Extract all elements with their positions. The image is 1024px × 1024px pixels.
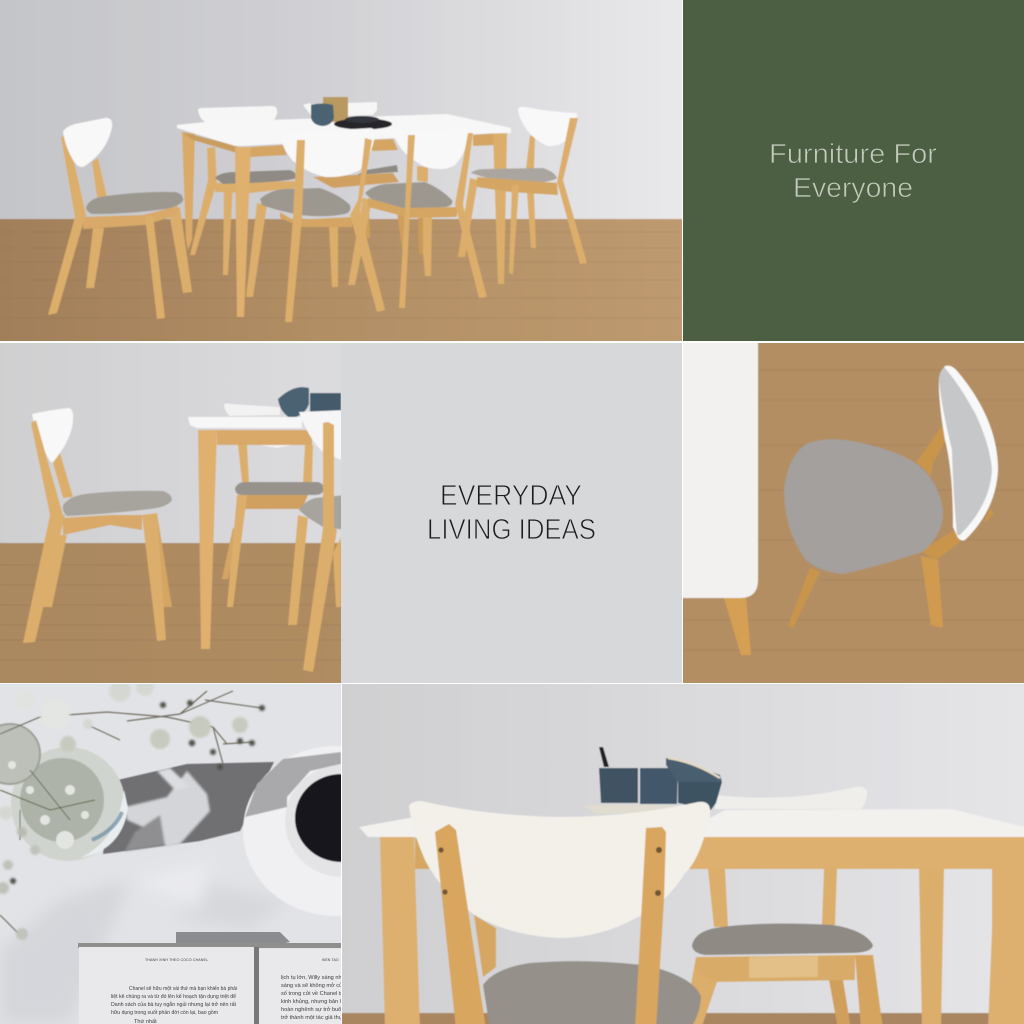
light caustic through vase xyxy=(125,768,210,851)
panel: dining set photo xyxy=(0,0,687,346)
rear chair back rest xyxy=(715,787,867,809)
book text: THANH XINH THEO COCO CHANEL xyxy=(145,958,208,962)
chair: front centre xyxy=(246,128,385,322)
chair back xyxy=(939,366,998,540)
chair: main side view xyxy=(23,408,172,643)
tableware xyxy=(311,97,392,130)
chair: front partly cropped xyxy=(288,410,346,672)
book text: Chanel sẽ hữu một vài thứ mà bạn khiến bà phải xyxy=(129,986,237,992)
table corner and leg xyxy=(678,338,758,655)
rear chair frame xyxy=(683,869,883,1024)
open book xyxy=(78,932,357,1024)
book text: Danh sách của bà tuy ngắn ngủi nhưng lại trở nên rất xyxy=(111,1001,236,1008)
baby's breath branches xyxy=(0,691,262,935)
book text: lịch tụ lớn, Willy sáng nhất xyxy=(281,975,347,981)
panel: side view chair and table photo xyxy=(0,338,346,688)
dining table xyxy=(177,114,511,317)
shadow on cloth xyxy=(103,762,274,854)
coffee cup xyxy=(286,766,341,876)
heading: furniture for everyone: Everyone xyxy=(793,172,913,203)
heading: furniture for everyone: Furniture For xyxy=(769,138,937,169)
chair: left xyxy=(48,118,192,319)
chair seat xyxy=(784,439,943,574)
heading: furniture for everyone xyxy=(769,138,937,203)
baby's breath flowers xyxy=(0,678,265,940)
book text: trở thành một tác giả thực xyxy=(281,1014,346,1021)
chair: back behind table xyxy=(222,403,324,607)
panel: table close-up photo xyxy=(337,679,1024,1024)
book text: liệt kê chúng ra và từ đó lên kế hoạch tận dụng triệt để xyxy=(111,993,236,1000)
book text: hoàn nghênh sự trở buổi đó xyxy=(281,1006,350,1013)
heading: everyday living ideas: EVERYDAY xyxy=(440,480,582,512)
saucer xyxy=(242,746,341,916)
tableware xyxy=(582,747,722,814)
dining table xyxy=(359,809,1024,1024)
panel: grey text block xyxy=(341,343,682,683)
book text: kinh khủng, nhưng bản lột xyxy=(281,998,346,1005)
chair: right xyxy=(458,107,587,274)
chair: front xyxy=(409,801,710,1024)
chair: back left xyxy=(190,106,297,275)
book text: hữu dụng trong suốt phần đời còn lại, bao gồm xyxy=(111,1010,218,1016)
book text: số trong cửi về Chanel trong xyxy=(281,990,352,997)
book text xyxy=(111,957,357,1024)
table with tableware xyxy=(188,387,341,649)
glass vase xyxy=(0,724,128,861)
chair legs xyxy=(788,426,994,628)
panel: still life photo xyxy=(0,684,341,1024)
still life scene xyxy=(0,684,341,1022)
chair: back centre xyxy=(303,102,432,287)
book text: sáng và sẽ không mở cửa cho xyxy=(281,982,357,989)
book text: KIỂN TẠO xyxy=(322,957,339,962)
heading: everyday living ideas xyxy=(427,480,596,546)
heading: everyday living ideas: LIVING IDEAS xyxy=(427,514,596,546)
chair: front right xyxy=(348,128,487,308)
panel: chair from above photo xyxy=(678,338,1024,688)
panel: green title block xyxy=(683,0,1024,341)
